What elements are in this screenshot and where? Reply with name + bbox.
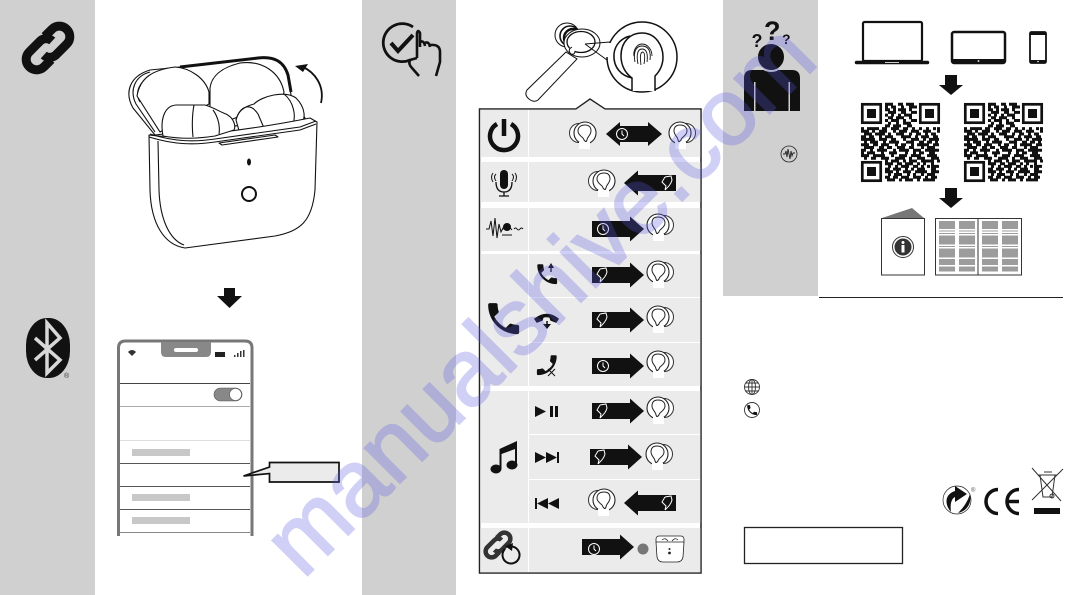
callout: device name bbox=[244, 462, 339, 482]
icon: bluetooth: ® bbox=[64, 372, 70, 380]
row dividers bbox=[528, 110, 700, 572]
row: voice assistant bbox=[492, 170, 676, 197]
arrow: lid opening bbox=[295, 64, 322, 103]
case body bbox=[149, 118, 317, 248]
icon: chain with reset arrow bbox=[483, 530, 520, 564]
icon: hang up bbox=[535, 314, 558, 329]
divider rule bbox=[819, 297, 1063, 298]
icon: phone bbox=[488, 303, 519, 334]
QR code 1 bbox=[861, 104, 940, 181]
rear right cushion bbox=[210, 63, 284, 120]
phone notch bbox=[161, 342, 211, 357]
earbud head bbox=[564, 29, 600, 57]
arrow: down bbox=[217, 288, 242, 308]
empty label box bbox=[744, 528, 902, 564]
icon: crossed bin bbox=[1032, 468, 1063, 514]
icon: play pause bbox=[535, 406, 558, 417]
icon: smartphone bbox=[1030, 32, 1046, 63]
case button bbox=[242, 187, 256, 201]
icon: reject call bbox=[537, 355, 557, 376]
case front latch bbox=[219, 135, 278, 145]
icon: CE mark bbox=[986, 490, 1019, 514]
icon: booklet bbox=[882, 208, 924, 275]
arrow: QR to manual bbox=[939, 188, 963, 208]
icon: bluetooth bbox=[26, 318, 70, 380]
icon: green dot recycling bbox=[943, 486, 976, 514]
icon: sound wave bbox=[486, 218, 523, 238]
QR code 2 bbox=[964, 104, 1043, 181]
row: noise cancelling bbox=[486, 214, 674, 242]
icon: answer call bbox=[537, 263, 557, 284]
status icons bbox=[128, 350, 244, 357]
grey row backgrounds bbox=[480, 100, 700, 572]
rim lines bbox=[149, 121, 316, 144]
icon: previous track bbox=[535, 498, 559, 509]
question marks: ? bbox=[752, 31, 762, 51]
icon: sound wave button bbox=[781, 146, 797, 162]
zoom earbud and finger bbox=[614, 36, 632, 78]
icon: next track bbox=[535, 452, 559, 463]
row: reset pairing bbox=[483, 530, 684, 564]
icon: tap gesture check bbox=[383, 24, 440, 76]
row: music bbox=[490, 397, 676, 516]
left earbud bbox=[162, 105, 235, 138]
right earbud bbox=[236, 94, 304, 134]
bluetooth toggle bbox=[214, 388, 242, 401]
zoom circle bbox=[607, 22, 677, 92]
earbud stem bbox=[526, 52, 577, 101]
icon: open manual pages bbox=[936, 218, 1022, 275]
icon: music note bbox=[490, 441, 518, 474]
icon: chain link bbox=[22, 22, 74, 74]
earbud ear tips bbox=[555, 23, 579, 47]
mini charging case bbox=[656, 536, 684, 562]
left grey sidebar bbox=[0, 0, 95, 595]
row: calls bbox=[488, 261, 674, 378]
middle grey sidebar bbox=[362, 0, 456, 595]
watermark: manualshive.com bbox=[243, 3, 834, 594]
icon: microphone bbox=[492, 170, 516, 196]
icon: telephone bbox=[744, 402, 760, 418]
status LED bbox=[247, 158, 251, 166]
illustration: open charging case with earbuds bbox=[129, 58, 317, 248]
status dot bbox=[638, 544, 648, 554]
arrow: double timed bbox=[606, 122, 662, 146]
fingerprint bbox=[634, 44, 652, 65]
row: power bbox=[490, 119, 696, 150]
panel: button functions bbox=[480, 99, 701, 573]
icon: tablet bbox=[952, 32, 1005, 63]
icon: confused person bbox=[744, 16, 800, 111]
device placeholder bars bbox=[132, 449, 190, 524]
icon: confused person: ? bbox=[764, 16, 780, 46]
icon: green dot recycling: ® bbox=[971, 487, 976, 494]
arrow: devices to QR bbox=[939, 75, 963, 95]
icon: power bbox=[490, 119, 518, 150]
icon: laptop bbox=[856, 22, 928, 62]
rear left cushion bbox=[137, 67, 209, 132]
illustration: earbud with fingerprint zoom bbox=[526, 22, 677, 101]
right grey sidebar bbox=[723, 0, 818, 296]
list row lines bbox=[120, 384, 250, 532]
case lid bbox=[129, 58, 305, 135]
phone: bluetooth settings screen bbox=[118, 341, 252, 536]
icon: globe bbox=[744, 380, 760, 394]
icon: confused person: ? bbox=[782, 31, 791, 47]
